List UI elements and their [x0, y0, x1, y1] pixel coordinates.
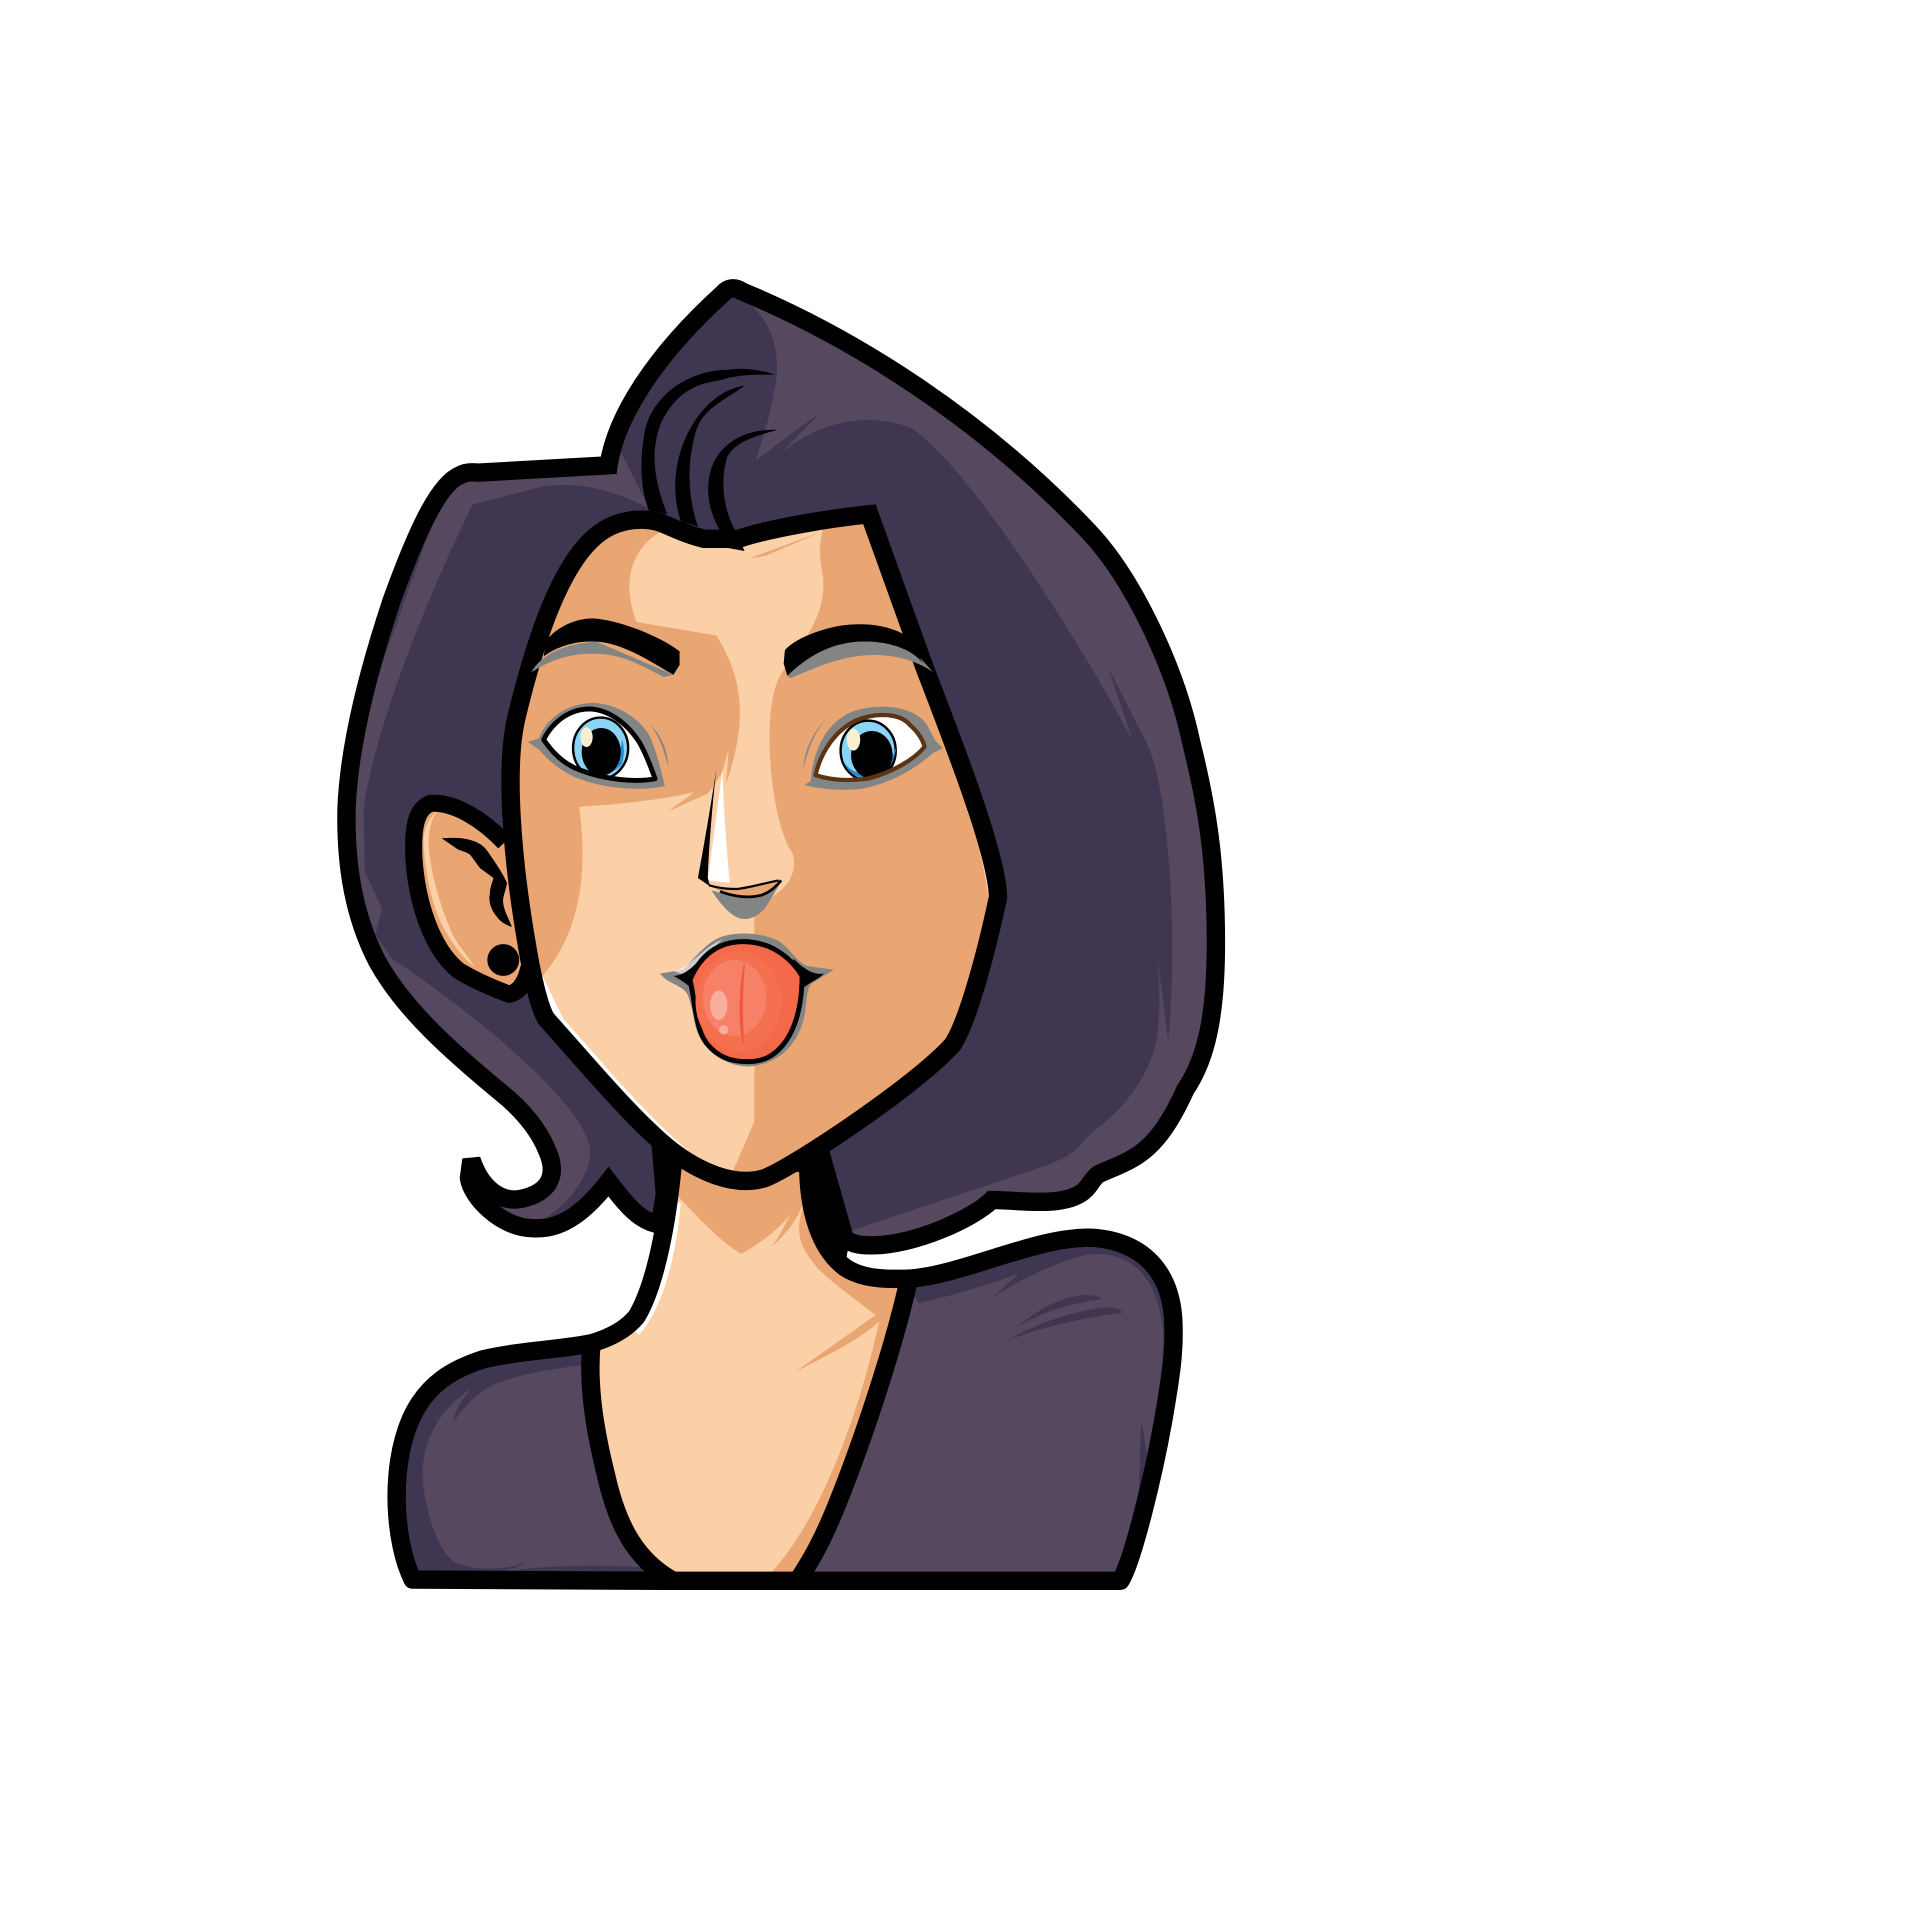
vest right — [798, 1254, 1163, 1573]
body outline — [397, 1157, 1174, 1581]
right eye crease — [803, 720, 825, 769]
right cheek rim — [967, 811, 989, 898]
face outline — [511, 514, 998, 1181]
chest skin — [600, 1168, 898, 1572]
tongue highlights — [710, 991, 727, 1020]
left eyebrow — [531, 618, 680, 677]
pupil — [582, 728, 621, 776]
white jaw sliver — [542, 976, 691, 1153]
iris — [841, 721, 896, 781]
face — [511, 514, 1004, 1181]
nose — [698, 769, 781, 919]
neck shadow — [678, 1168, 802, 1254]
forehead streak — [749, 531, 823, 558]
ear — [414, 803, 529, 994]
hair parting tip — [698, 534, 744, 551]
hair highlights — [356, 306, 1207, 1236]
ear highlight — [423, 811, 475, 967]
lip highlight — [673, 939, 722, 975]
neck white sliver — [632, 1202, 681, 1335]
face light areas — [527, 514, 1004, 1176]
illustration: woman with tongue out — [337, 279, 1226, 1590]
tongue inner shading — [696, 951, 781, 1052]
tongue centre line — [740, 964, 744, 1043]
tongue — [690, 942, 802, 1062]
nostril — [709, 880, 779, 897]
vest wrinkles — [1007, 1295, 1147, 1490]
inner ear curve — [442, 838, 512, 927]
body with neck and vest — [397, 1151, 1174, 1581]
left eye crease — [649, 724, 669, 768]
collar shadow — [772, 1208, 898, 1572]
ear outline — [414, 803, 529, 994]
mouth and tongue — [660, 934, 834, 1067]
earring — [487, 944, 519, 976]
lip corners — [673, 959, 824, 989]
vest left — [422, 1365, 644, 1571]
hair outline — [346, 288, 1216, 1245]
neck wedge under hair — [800, 1151, 850, 1266]
right eyebrow — [784, 624, 933, 678]
left eye — [528, 703, 669, 789]
right eye — [803, 707, 943, 790]
left eyelid line — [544, 709, 655, 780]
hair — [337, 279, 1226, 1257]
right eyelid line — [816, 715, 924, 780]
hair tufts — [641, 369, 778, 534]
iris — [573, 718, 628, 779]
pupil — [851, 731, 893, 779]
